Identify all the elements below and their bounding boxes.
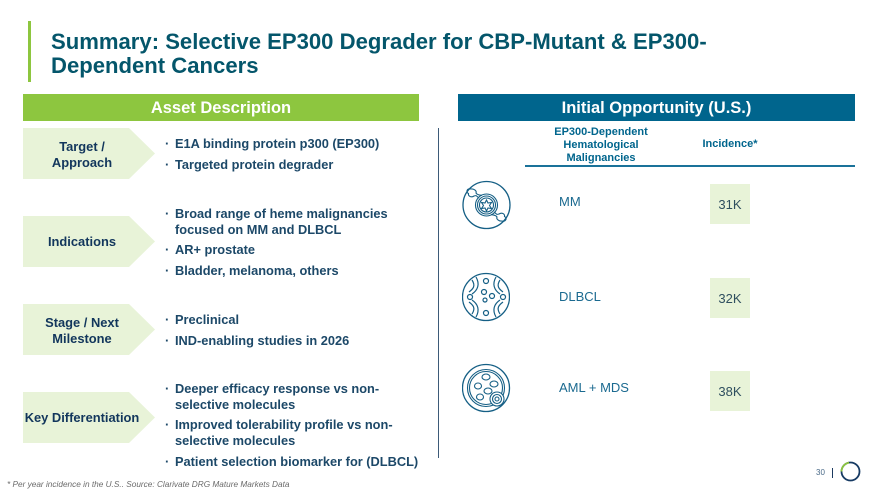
column heading: incidence: Incidence* <box>702 138 758 150</box>
arrow label: stage / next milestone <box>23 304 155 355</box>
value: 31K <box>710 184 750 224</box>
value: 32K <box>710 278 750 318</box>
bullets: key differentiation: Deeper efficacy response vs non- <box>175 381 379 396</box>
arrow label: key differentiation <box>23 392 155 443</box>
title <box>51 29 707 78</box>
bullets: stage / next milestone <box>165 312 349 348</box>
page divider <box>832 468 833 478</box>
value: 31K: 31K <box>718 197 742 212</box>
label: MM: MM <box>559 194 581 209</box>
title: Summary: Selective EP300 Degrader for CBP-Mutant & EP300- <box>51 29 707 54</box>
icon: AML and MDS cells <box>462 364 510 412</box>
arrow label: stage / next milestone: Milestone <box>52 330 112 346</box>
value: 38K: 38K <box>718 384 742 399</box>
bullets: target / approach: Targeted protein degrader <box>175 157 333 172</box>
bullets: key differentiation <box>165 381 418 469</box>
bullets: indications <box>165 206 388 278</box>
bullets: stage / next milestone: · <box>165 312 169 327</box>
bullets: target / approach <box>165 136 379 172</box>
icon: logo ring <box>840 462 860 482</box>
bullets: indications: · <box>165 206 169 221</box>
value: 38K <box>710 371 750 411</box>
label: DLBCL: DLBCL <box>559 289 601 304</box>
bullets: indications: focused on MM and DLBCL <box>175 222 341 236</box>
column heading: malignancies: Hematological <box>563 138 639 150</box>
bullets: key differentiation: selective molecules <box>175 432 295 448</box>
bullets: target / approach: E1A binding protein p300 (EP300) <box>175 136 379 151</box>
panel header: asset description: Asset Description <box>151 99 291 117</box>
label: AML + MDS: AML + MDS <box>559 380 629 395</box>
bullets: indications: Broad range of heme malignancies <box>175 206 388 221</box>
page number: 30 <box>816 468 825 477</box>
panel header: initial opportunity: Initial Opportunity (U.S.) <box>562 99 751 117</box>
bullets: indications: · <box>165 242 169 257</box>
bullets: key differentiation: Patient selection biomarker for (DLBCL) <box>175 454 418 469</box>
column heading: malignancies: EP300-Dependent <box>554 126 648 138</box>
bullets: target / approach: · <box>165 157 169 172</box>
column heading: malignancies: Malignancies <box>566 152 636 164</box>
bullets: indications: Bladder, melanoma, others <box>175 263 339 278</box>
vertical divider <box>438 128 439 458</box>
icon: DLBCL cells <box>462 272 510 322</box>
bullets: key differentiation: Improved tolerability profile vs non- <box>175 417 393 432</box>
bullets: stage / next milestone: IND-enabling studies in 2026 <box>175 333 349 348</box>
panel header: asset description <box>23 94 419 121</box>
bullets: target / approach: · <box>165 136 169 151</box>
title accent bar <box>28 21 31 82</box>
arrow label: stage / next milestone: Stage / Next <box>45 315 119 330</box>
column heading: malignancies <box>554 126 648 164</box>
arrow label: indications <box>23 216 155 267</box>
value: 32K: 32K <box>718 291 742 306</box>
bullets: indications: AR+ prostate <box>175 242 255 257</box>
bullets: key differentiation: selective molecules <box>175 396 295 412</box>
footnote: * Per year incidence in the U.S.. Source: Clarivate DRG Mature Markets Data <box>7 480 289 489</box>
bullets: key differentiation: · <box>165 454 169 469</box>
title: Dependent Cancers <box>51 53 258 78</box>
bullets: key differentiation: · <box>165 417 169 432</box>
arrow label: indications: Indications <box>48 234 116 249</box>
arrow label: target / approach: Target / <box>59 139 105 154</box>
bullets: stage / next milestone: · <box>165 333 169 348</box>
icon: bone marrow <box>462 180 511 230</box>
bullets: key differentiation: · <box>165 381 169 396</box>
table rule <box>525 165 855 166</box>
arrow label: target / approach <box>23 128 155 179</box>
arrow label: key differentiation: Key Differentiation <box>25 410 139 425</box>
arrow label: target / approach: Approach <box>52 154 112 170</box>
bullets: stage / next milestone: Preclinical <box>175 312 239 327</box>
panel header: initial opportunity <box>458 94 855 121</box>
bullets: indications: · <box>165 263 169 278</box>
